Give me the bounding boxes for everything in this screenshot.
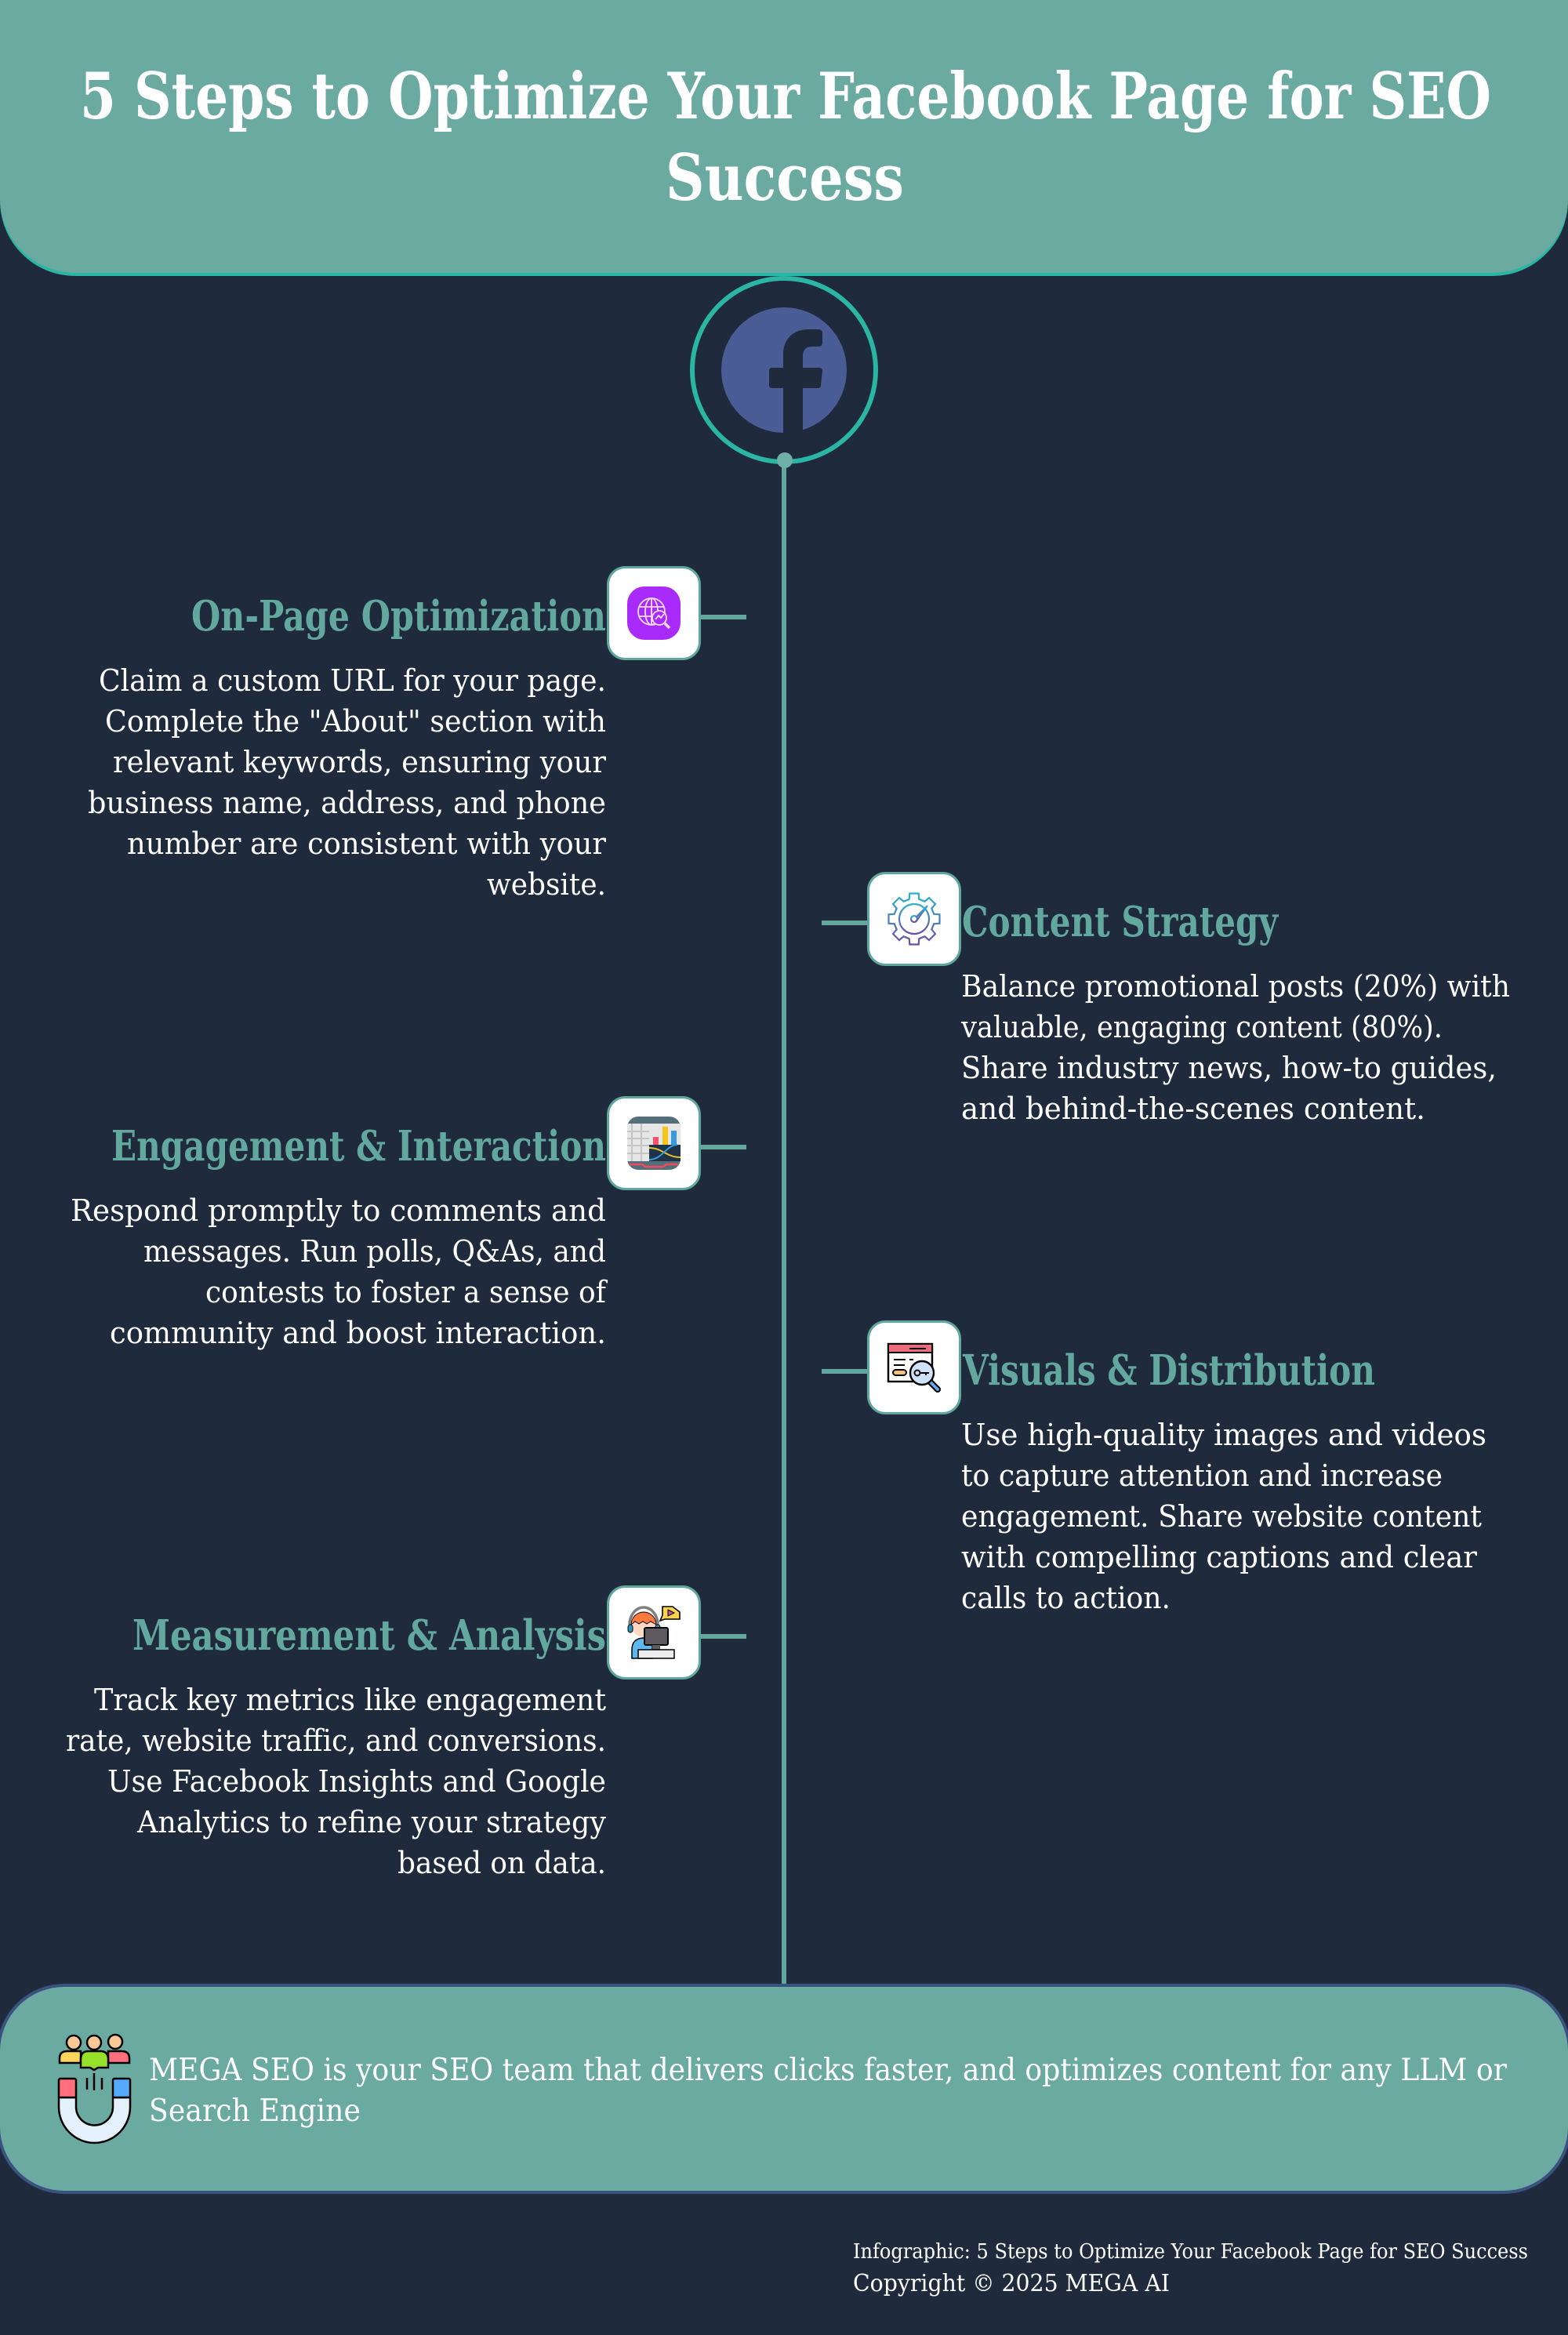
body text 5: Analytics to refine your strategy bbox=[136, 1805, 607, 1839]
footer credits: Infographic: 5 Steps to Optimize Your Facebook Page for SEO Success bbox=[853, 2240, 1528, 2264]
icon card 5 bbox=[608, 1587, 699, 1678]
body text 3 bbox=[71, 1193, 608, 1350]
footer callout panel bbox=[0, 1985, 1568, 2192]
body text 4: engagement. Share website content bbox=[961, 1499, 1482, 1534]
icon card 3 bbox=[608, 1098, 699, 1189]
footer credits: Copyright © 2025 MEGA AI bbox=[853, 2270, 1170, 2297]
connector 1 bbox=[698, 615, 746, 619]
body text 1: business name, address, and phone bbox=[88, 786, 606, 820]
connector 2 bbox=[822, 921, 870, 925]
body text 3: messages. Run polls, Q&As, and bbox=[143, 1234, 606, 1269]
heading: visuals and distribution: Visuals & Distribution bbox=[962, 1346, 1375, 1395]
connector 5 bbox=[698, 1634, 746, 1639]
title bbox=[80, 60, 1491, 216]
heading: measurement and analysis: Measurement & Analysis bbox=[132, 1611, 606, 1660]
heading: engagement and interaction: Engagement & Interaction bbox=[111, 1122, 606, 1171]
icon card 4 bbox=[869, 1322, 960, 1413]
body text 4: to capture attention and increase bbox=[961, 1458, 1443, 1493]
body text 3: contests to foster a sense of bbox=[205, 1275, 608, 1309]
body text 1: number are consistent with your bbox=[127, 826, 607, 861]
footer credits bbox=[853, 2240, 1528, 2297]
heading: content strategy: Content Strategy bbox=[962, 898, 1279, 946]
body text 2: and behind-the-scenes content. bbox=[961, 1091, 1425, 1126]
body text 1: Complete the "About" section with bbox=[105, 704, 606, 739]
body text 1: relevant keywords, ensuring your bbox=[113, 745, 607, 779]
connector 4 bbox=[822, 1369, 870, 1374]
body text 5: based on data. bbox=[397, 1846, 606, 1880]
body text 2: Share industry news, how-to guides, bbox=[961, 1051, 1497, 1085]
body text 3: community and boost interaction. bbox=[110, 1316, 606, 1350]
step 5: measurement and analysis bbox=[66, 1587, 746, 1880]
step 2: content strategy bbox=[822, 873, 1510, 1126]
icon card 2 bbox=[869, 873, 960, 964]
body text 4: with compelling captions and clear bbox=[961, 1540, 1478, 1574]
body text 3: Respond promptly to comments and bbox=[71, 1193, 606, 1228]
callout text: Search Engine bbox=[149, 2094, 361, 2129]
body text 4: calls to action. bbox=[961, 1581, 1171, 1615]
callout text bbox=[149, 2053, 1507, 2129]
step 4: visuals and distribution bbox=[822, 1322, 1486, 1615]
icon: facebook logo in ring bbox=[692, 278, 876, 468]
body text 1 bbox=[88, 663, 607, 902]
body text 2: Balance promotional posts (20%) with bbox=[961, 969, 1510, 1004]
timeline line bbox=[782, 459, 786, 1986]
icon: team magnet bbox=[59, 2035, 130, 2143]
body text 4: Use high-quality images and videos bbox=[961, 1418, 1486, 1452]
body text 4 bbox=[961, 1418, 1486, 1615]
body text 1: website. bbox=[487, 867, 606, 902]
body text 2: valuable, engaging content (80%). bbox=[960, 1010, 1443, 1044]
body text 5: Track key metrics like engagement bbox=[94, 1683, 606, 1717]
body text 5 bbox=[66, 1683, 607, 1880]
body text 5: rate, website traffic, and conversions. bbox=[66, 1723, 606, 1758]
body text 1: Claim a custom URL for your page. bbox=[99, 663, 606, 698]
step 3: engagement and interaction bbox=[71, 1098, 746, 1350]
heading: on-page optimization: On-Page Optimization bbox=[191, 592, 606, 641]
body text 2 bbox=[960, 969, 1510, 1126]
step 1: on-page optimization bbox=[88, 568, 746, 902]
header banner bbox=[0, 0, 1568, 276]
title: Success bbox=[666, 141, 904, 216]
connector 3 bbox=[698, 1145, 746, 1149]
body text 5: Use Facebook Insights and Google bbox=[107, 1764, 606, 1799]
icon card 1 bbox=[608, 568, 699, 659]
